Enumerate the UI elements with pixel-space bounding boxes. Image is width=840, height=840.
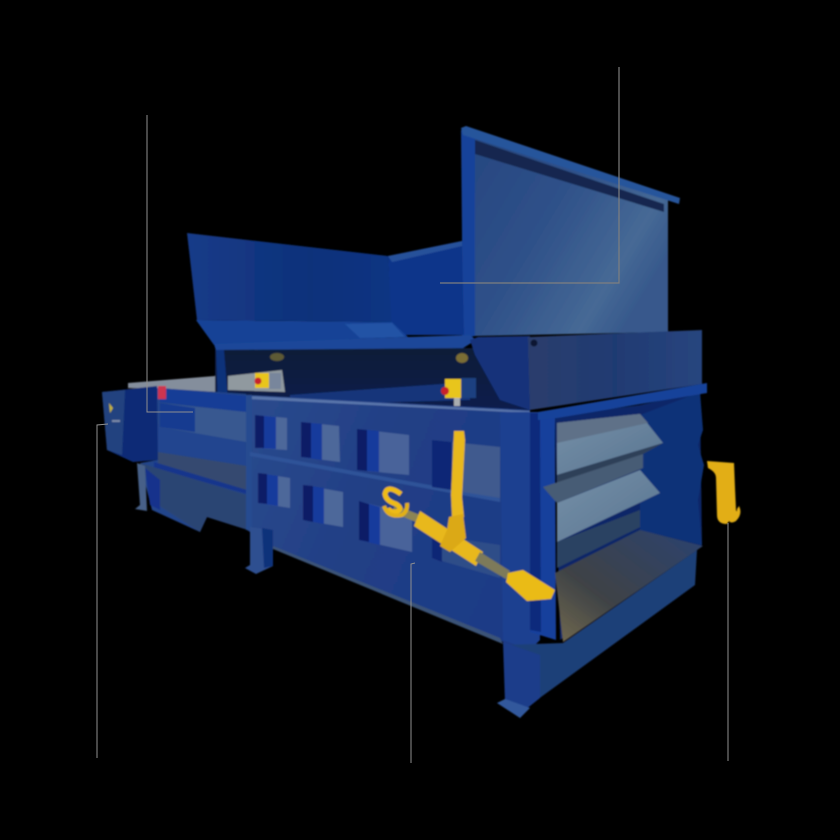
- baler machine: [102, 126, 740, 718]
- red tag: [158, 386, 166, 399]
- right frame column: [500, 412, 556, 650]
- top right beam: [538, 383, 707, 420]
- center leg: [245, 527, 273, 574]
- hopper: [187, 233, 476, 351]
- yellow ratchet binder: [384, 431, 555, 601]
- left leg: [135, 463, 147, 511]
- right upper box: [470, 330, 702, 410]
- leader line: hook: [727, 523, 729, 761]
- left section of chamber: [140, 388, 248, 532]
- yellow hook: [707, 461, 740, 524]
- under-hopper recess: [215, 345, 530, 410]
- louvre plates: [543, 414, 663, 568]
- leader line: rear plate: [440, 67, 619, 283]
- emergency stop right: [441, 378, 476, 406]
- lower front body: [246, 395, 530, 660]
- front window row 2: [258, 473, 500, 578]
- emergency stop left: [254, 373, 281, 389]
- leader line: front body: [411, 563, 415, 763]
- chamber floor: [555, 530, 703, 642]
- left end box: [102, 386, 158, 462]
- top bed band: [128, 370, 285, 392]
- right lower panel and foot: [497, 550, 697, 718]
- rear plate: [461, 126, 680, 338]
- right opening interior: [555, 392, 704, 640]
- leader line: left end: [97, 424, 108, 758]
- leader line: left section: [147, 115, 193, 412]
- front window row 1: [255, 415, 500, 498]
